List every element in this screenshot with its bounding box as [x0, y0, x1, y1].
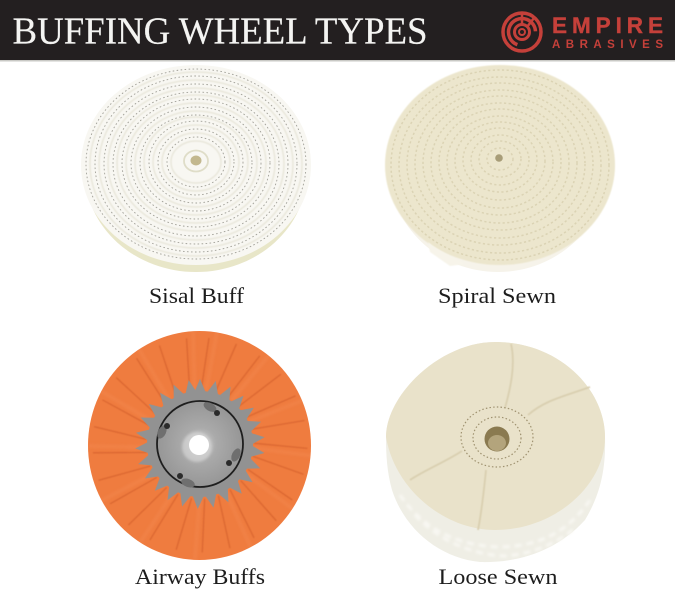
- spiral face: [385, 65, 615, 265]
- loose face creases: [410, 344, 590, 530]
- airway hub plate: [157, 401, 243, 487]
- wheel: airway buff: [86, 331, 314, 560]
- wheel: loose sewn: [386, 342, 605, 562]
- sisal face: [81, 65, 311, 265]
- sisal ring shading: [90, 72, 302, 256]
- wheel: spiral sewn: [385, 65, 615, 272]
- wheel: sisal buff: [81, 65, 311, 272]
- logo: Empire Abrasives: [503, 13, 663, 51]
- loose centre hole: [484, 426, 510, 452]
- sisal centre hole: [184, 150, 208, 172]
- spiral rim: [390, 68, 606, 272]
- airway orange cloth: [88, 331, 311, 560]
- header bar: [0, 0, 675, 62]
- label: airway buffs: Airway Buffs: [135, 564, 265, 589]
- airway toothed gear: [135, 379, 265, 509]
- spiral stitching: [391, 70, 609, 260]
- logo subtitle: ABRASIVES: [552, 39, 663, 51]
- loose frayed texture: [400, 495, 590, 556]
- spiral centre hole: [495, 154, 503, 162]
- sisal stitching: [86, 69, 306, 259]
- airway pleats: [93, 338, 308, 552]
- loose side wall: [386, 342, 605, 562]
- airway rivets: [155, 400, 243, 489]
- spiral fray: [428, 242, 465, 266]
- loose stitching: [461, 407, 533, 467]
- label: spiral sewn: Spiral Sewn: [438, 283, 556, 308]
- loose top face: [386, 342, 605, 530]
- icon: logo wheel: [503, 13, 541, 51]
- sisal rim: [85, 72, 307, 272]
- label: loose sewn: Loose Sewn: [438, 564, 558, 589]
- label: sisal buff: Sisal Buff: [149, 283, 245, 308]
- logo wordmark: EMPIRE: [552, 13, 663, 38]
- airway centre hole: [182, 432, 212, 462]
- title: BUFFING WHEEL TYPES: [12, 10, 428, 52]
